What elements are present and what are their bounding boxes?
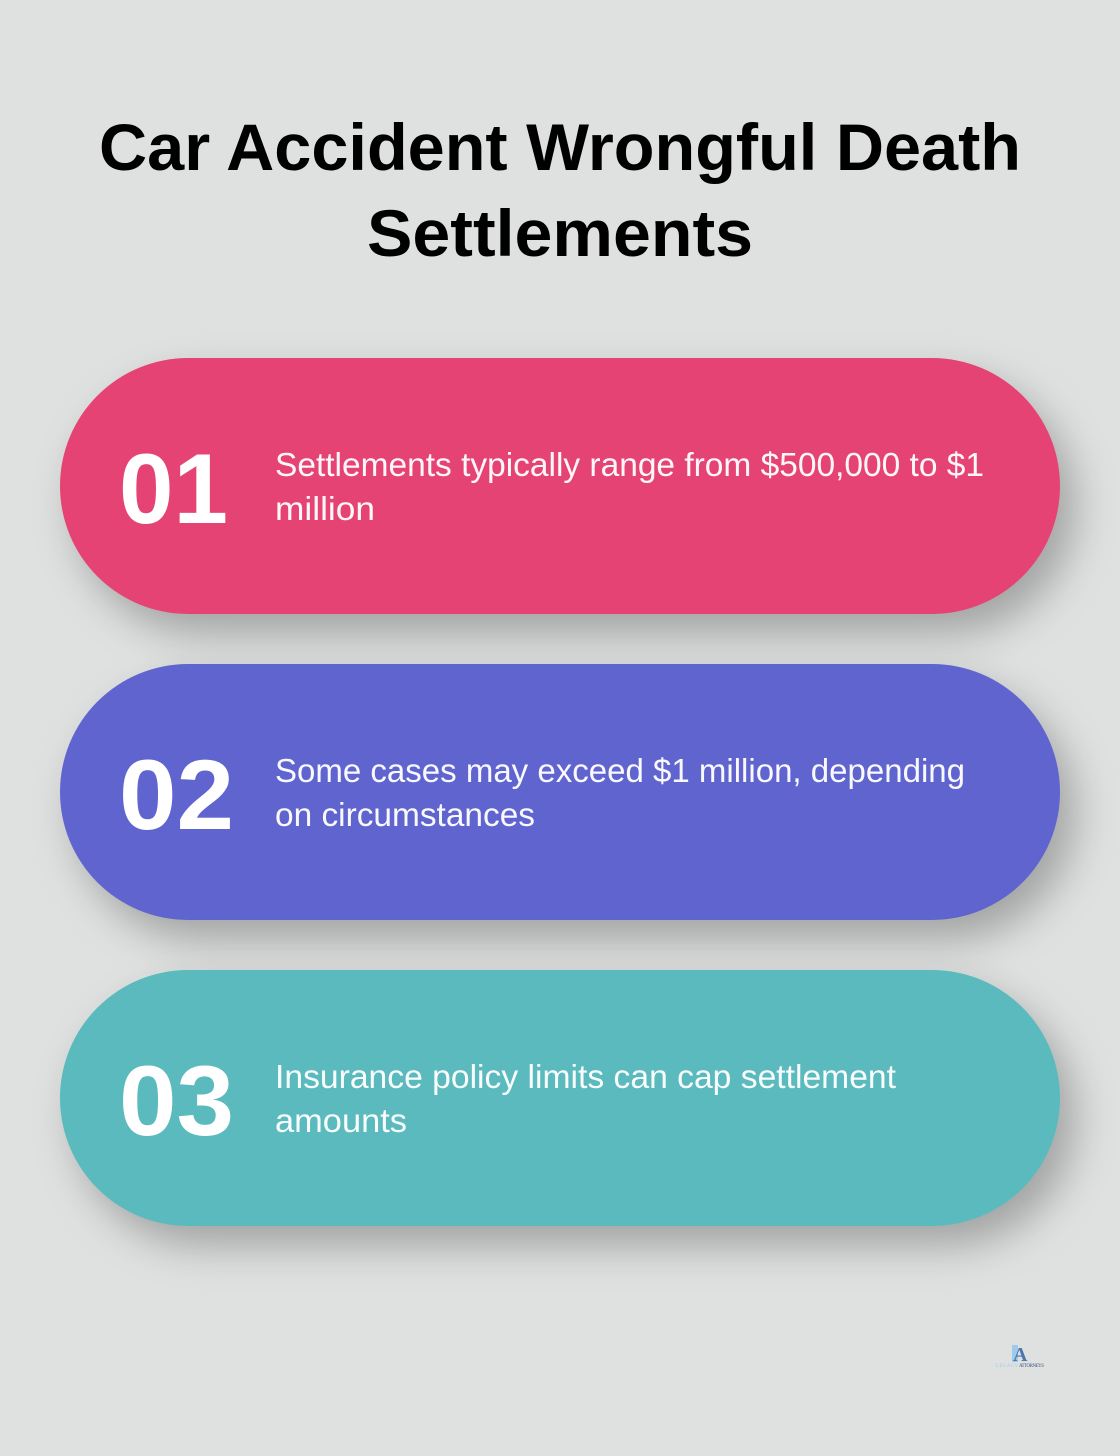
number 03: 03 — [119, 1045, 234, 1156]
number 01: 01 — [119, 433, 228, 544]
logo: Legacy Attorneys: LEGACY — [996, 1364, 1018, 1369]
text 03: amounts — [275, 1102, 407, 1139]
text 02 — [275, 752, 965, 833]
pill background 01 — [60, 358, 1060, 614]
text 02: Some cases may exceed $1 million, depending — [275, 752, 965, 789]
pill background 02 — [60, 664, 1060, 920]
panel: item 01 — [60, 358, 1060, 614]
number 02: 02 — [119, 739, 234, 850]
text 01: Settlements typically range from $500,000 to $1 — [275, 446, 984, 483]
logo: Legacy Attorneys: ATTORNEYS — [1019, 1364, 1044, 1369]
text 03 — [275, 1058, 896, 1139]
panel: item 02 — [60, 664, 1060, 920]
title: Car Accident Wrongful Death — [99, 110, 1021, 184]
logo: Legacy Attorneys: A — [1013, 1344, 1028, 1366]
pill background 03 — [60, 970, 1060, 1226]
text 03: Insurance policy limits can cap settlement — [275, 1058, 896, 1095]
text 02: on circumstances — [275, 796, 535, 833]
text 01 — [275, 446, 984, 527]
logo: Legacy Attorneys — [996, 1344, 1044, 1369]
panel: item 03 — [60, 970, 1060, 1226]
title — [99, 110, 1021, 270]
text 01: million — [275, 490, 375, 527]
title: Settlements — [367, 196, 753, 270]
